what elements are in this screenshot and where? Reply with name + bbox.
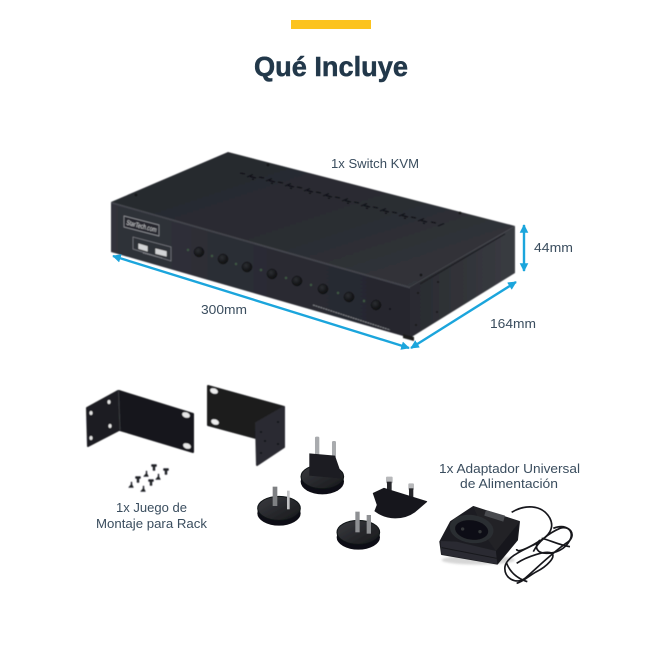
left rack bracket [87, 391, 193, 452]
reset pinhole [389, 308, 391, 310]
logo badge: StarTech.com [125, 220, 157, 234]
label: power adapter: de Alimentación [460, 476, 558, 491]
adapter body [440, 507, 519, 564]
label: 44mm: 44mm [534, 240, 573, 255]
model caption strip [313, 305, 390, 330]
adapter top face [473, 507, 519, 551]
label: 300mm: 300mm [201, 302, 247, 317]
label: rack mount kit: 1x Juego de [116, 500, 187, 515]
port buttons [194, 247, 381, 310]
switch foot [403, 334, 414, 341]
dimension arrow: 300mm [113, 256, 409, 348]
USB ports [133, 237, 171, 261]
dimension arrow: 164mm [411, 282, 516, 348]
mounting screws [128, 464, 168, 492]
power adapter [440, 507, 572, 583]
adapter right face [496, 523, 519, 564]
plug: AU [257, 487, 301, 526]
label: power adapter: 1x Adaptador Universal [439, 461, 580, 476]
switch top panel [111, 152, 515, 287]
right rack bracket [208, 386, 284, 465]
adapter front face [441, 541, 497, 564]
label: switch: 1x Switch KVM [331, 156, 419, 171]
label: power adapter [439, 461, 580, 491]
logo badge [124, 216, 159, 236]
adapter markings [484, 510, 505, 522]
switch front panel [111, 202, 410, 338]
top screws [135, 164, 461, 276]
plug: UK [373, 477, 427, 518]
plug: US [337, 512, 380, 550]
switch side panel [410, 226, 515, 338]
port LEDs [187, 249, 365, 302]
adapter socket [448, 512, 495, 546]
top vent slots [240, 173, 444, 226]
title: Qué Incluye [254, 51, 408, 82]
plug: EU [301, 437, 344, 494]
label: rack mount kit [96, 500, 207, 531]
adapter shadow [442, 555, 515, 565]
side screws [415, 281, 439, 326]
adapter cable [505, 507, 572, 583]
accent bar [291, 20, 371, 29]
dimension arrow: 44mm [523, 225, 525, 271]
product: KVM switch [111, 152, 515, 341]
label: 164mm: 164mm [490, 316, 536, 331]
label: rack mount kit: Montaje para Rack [96, 516, 207, 531]
